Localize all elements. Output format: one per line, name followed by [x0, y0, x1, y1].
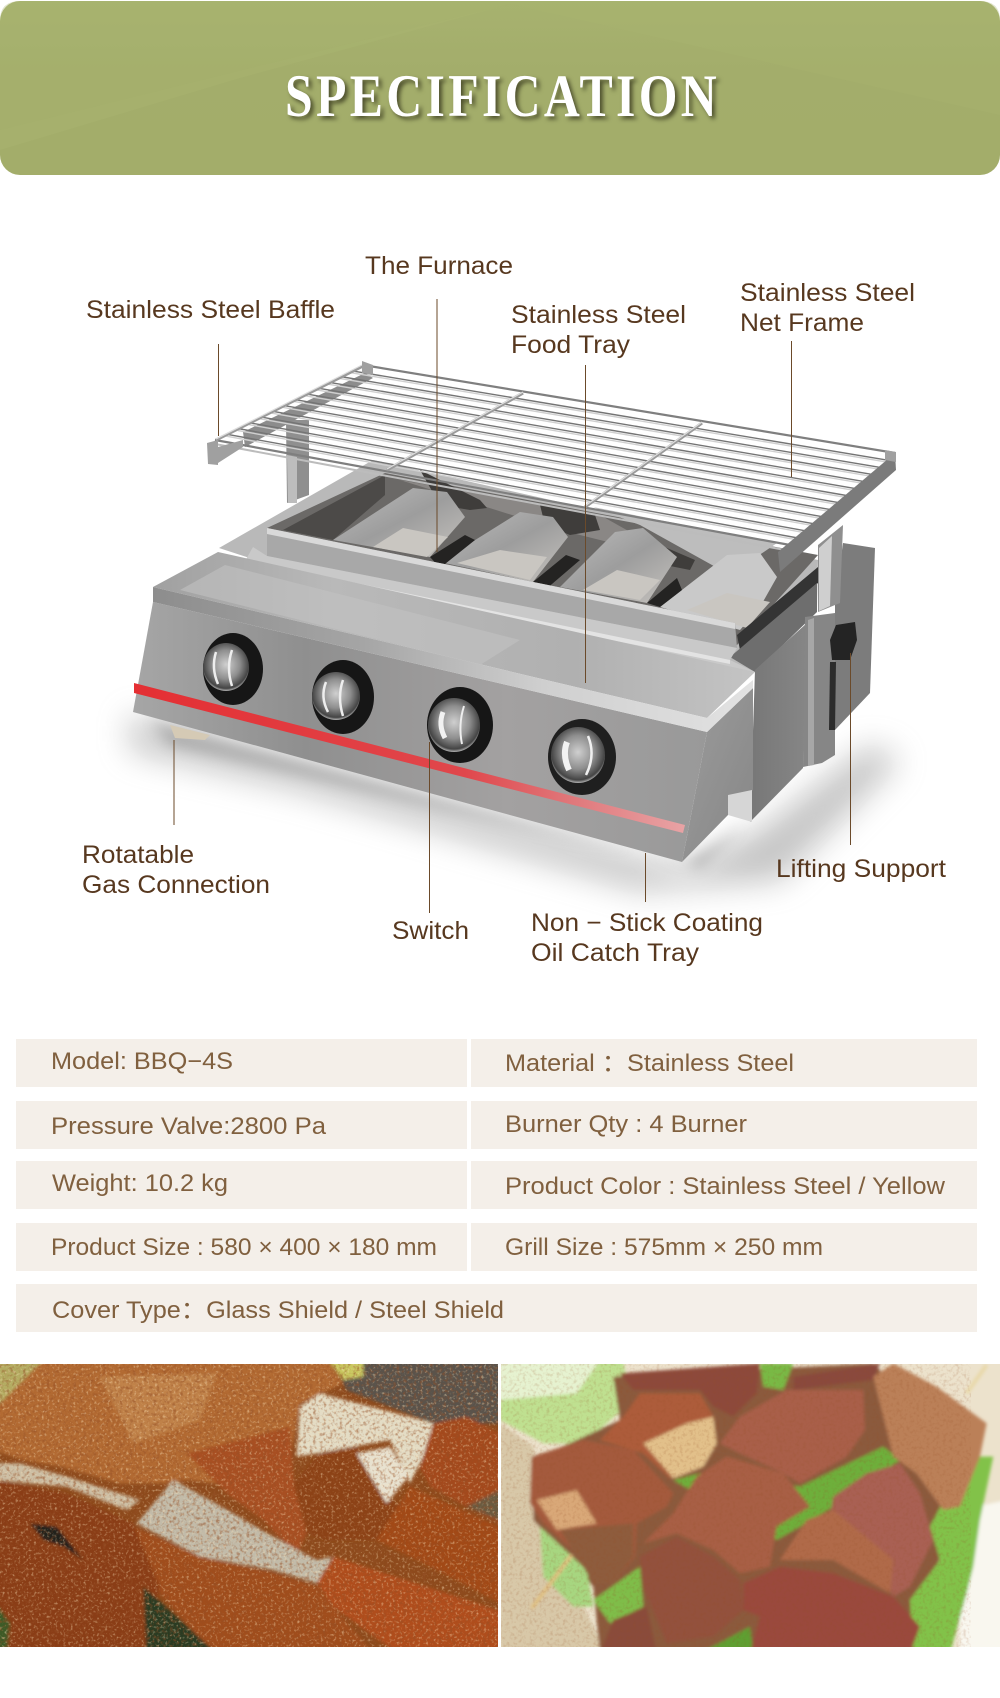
label: oil catch tray: Oil Catch Tray	[531, 939, 700, 967]
frame side band	[778, 453, 896, 572]
tray lip	[267, 528, 737, 648]
label: food tray	[511, 301, 686, 359]
ground shadow	[130, 715, 900, 890]
label: gas connection: Gas Connection	[82, 871, 270, 899]
row: sizes: Grill Size : 575mm × 250 mm	[505, 1234, 823, 1261]
texture: spice speckle	[0, 1364, 498, 1647]
label: food tray: Food Tray	[511, 331, 631, 359]
burner: two	[440, 512, 568, 582]
row: pressure and burner	[16, 1101, 977, 1149]
label: oil catch tray: Non − Stick Coating	[531, 909, 763, 937]
upper deck	[219, 460, 818, 672]
right rail	[737, 567, 818, 650]
label: the furnace: The Furnace	[365, 252, 513, 280]
front lip	[153, 587, 753, 732]
frame brackets	[207, 361, 896, 465]
left plate under frame	[243, 373, 373, 447]
row: sizes: Product Size : 580 × 400 × 180 mm	[51, 1234, 437, 1261]
label: lifting support: Lifting Support	[776, 855, 946, 883]
support legs	[286, 420, 843, 612]
ceramic plates	[373, 528, 770, 628]
right body panel	[750, 623, 807, 822]
row: weight and color	[16, 1161, 977, 1209]
rear side panel	[835, 543, 875, 730]
row: weight and color: Weight: 10.2 kg	[52, 1170, 228, 1197]
net frame	[215, 365, 895, 550]
label: stainless steel baffle: Stainless Steel Baffle	[86, 296, 335, 324]
row: model and material: Material ：Stainless Steel	[505, 1050, 794, 1077]
panel: header banner	[0, 1, 1000, 175]
rear ledge	[240, 547, 755, 672]
burner: four	[660, 553, 777, 630]
label: gas connection	[82, 841, 270, 899]
row: sizes	[16, 1223, 977, 1271]
lift bracket	[803, 613, 835, 767]
knob two	[312, 660, 374, 734]
burner shields	[420, 470, 695, 570]
label: net frame: Net Frame	[740, 309, 864, 337]
label: food tray: Stainless Steel	[511, 301, 686, 329]
burner: one	[333, 488, 465, 557]
title: SPECIFICATION	[285, 63, 720, 129]
knob four	[548, 719, 616, 795]
label: net frame	[740, 279, 915, 337]
panel: specification table	[16, 1039, 977, 1332]
knob one	[203, 633, 263, 705]
label: switch: Switch	[392, 917, 469, 945]
label: gas connection: Rotatable	[82, 841, 194, 869]
row: cover type: Cover Type：Glass Shield / Steel Shield	[52, 1297, 504, 1324]
row: pressure and burner: Pressure Valve:2800 Pa	[51, 1113, 327, 1140]
grill illustration	[133, 361, 896, 862]
label: oil catch tray	[531, 909, 763, 967]
red stripe	[134, 683, 685, 833]
leader lines	[174, 299, 850, 913]
front wedge side	[682, 688, 753, 862]
row: model and material	[16, 1039, 977, 1087]
knob three	[427, 687, 493, 763]
front tray top	[153, 552, 755, 718]
row: model and material: Model: BBQ−4S	[51, 1048, 233, 1075]
front panel	[133, 602, 707, 862]
panel: product diagram	[82, 252, 946, 967]
row: pressure and burner: Burner Qty : 4 Burner	[505, 1111, 747, 1138]
photo: grilled ribs	[0, 1353, 507, 1653]
row: cover type	[16, 1284, 977, 1332]
photo: meat skewers	[500, 1360, 1000, 1653]
gas connection	[170, 725, 210, 740]
row: weight and color: Product Color : Stainless Steel / Yellow	[505, 1173, 946, 1200]
burner: three	[560, 528, 677, 603]
label: net frame: Stainless Steel	[740, 279, 915, 307]
burner gaps	[430, 535, 682, 607]
lift knob	[829, 622, 857, 730]
burner tray interior	[267, 473, 818, 645]
texture: seasoning speckle	[501, 1364, 971, 1647]
